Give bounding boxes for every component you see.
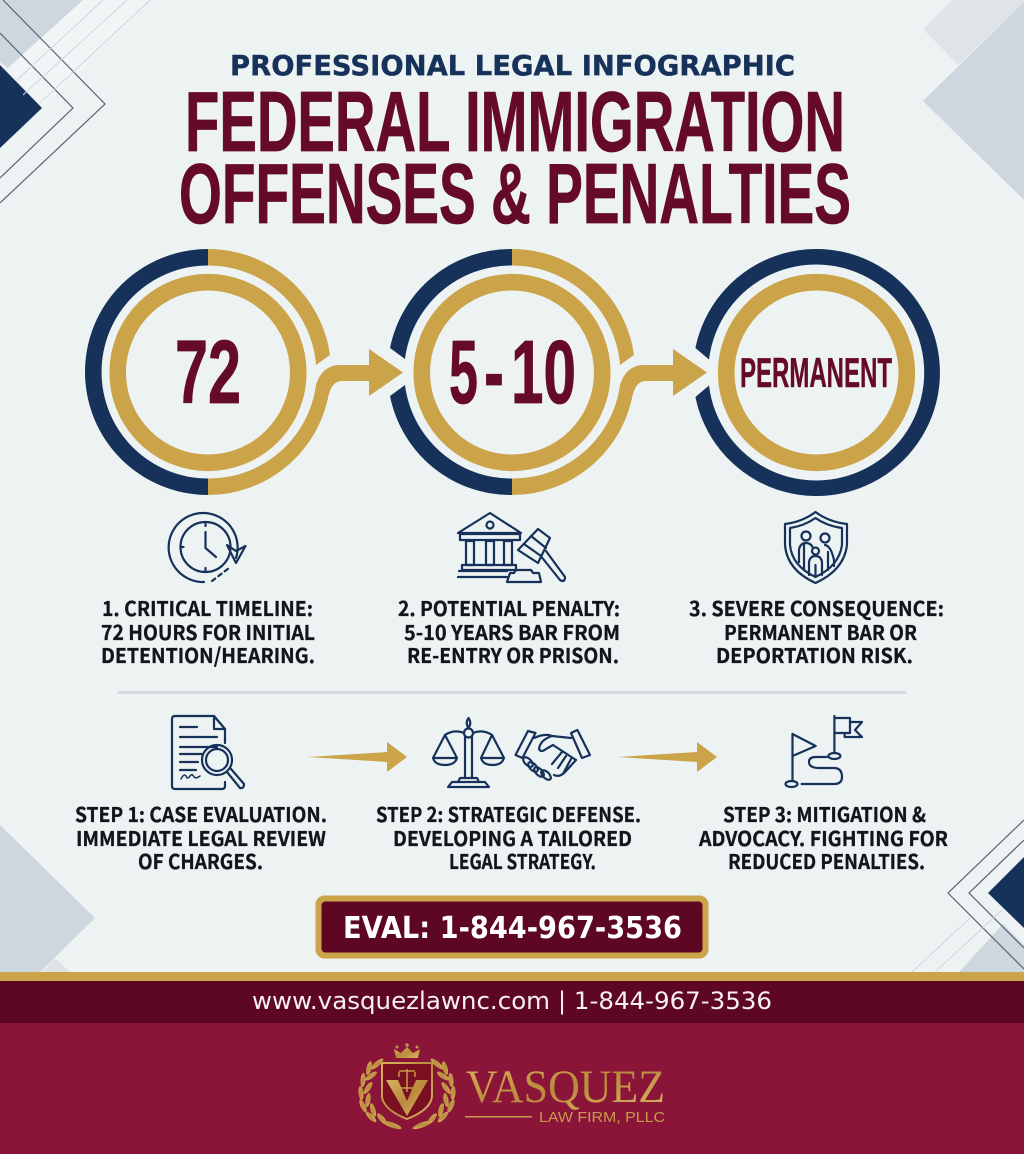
text: critical timeline: DETENTION/HEARING. xyxy=(101,639,315,669)
text: step 3: STEP 3: MITIGATION & xyxy=(723,798,926,828)
text: step 3: REDUCED PENALTIES. xyxy=(728,845,925,875)
icon: courthouse and gavel xyxy=(458,513,565,582)
text: severe consequence: DEPORTATION RISK. xyxy=(716,639,913,669)
stat circle: 5-10: - xyxy=(484,323,504,423)
text: potential penalty: 2. POTENTIAL PENALTY: xyxy=(398,592,620,622)
contact strip xyxy=(0,981,1024,1023)
crown xyxy=(394,1043,420,1058)
text: potential penalty xyxy=(398,592,620,669)
decoration: bottom-left diamonds xyxy=(0,825,95,972)
text: step 3 xyxy=(698,798,948,875)
text: potential penalty: RE-ENTRY OR PRISON. xyxy=(407,639,619,669)
text: step 1: IMMEDIATE LEGAL REVIEW xyxy=(76,822,326,852)
text: step 1: STEP 1: CASE EVALUATION. xyxy=(75,798,327,828)
shield crest xyxy=(382,1063,432,1119)
text: severe consequence: PERMANENT BAR OR xyxy=(724,616,917,646)
wordmark subtitle: LAW FIRM, PLLC xyxy=(539,1109,665,1126)
eyebrow heading: PROFESSIONAL LEGAL INFOGRAPHIC xyxy=(230,49,795,82)
arrow: step 1 to step 2 xyxy=(308,742,407,772)
stat circle: 5-10: 10 xyxy=(511,323,576,423)
text: step 1: OF CHARGES. xyxy=(138,845,263,875)
stat circle: permanent xyxy=(695,249,940,496)
laurel wreath xyxy=(358,1057,456,1131)
stat circle: permanent: PERMANENT xyxy=(740,349,892,396)
wordmark: VASQUEZ xyxy=(466,1061,665,1113)
stat circle: 72: 72 xyxy=(175,323,241,423)
footer panel xyxy=(0,1023,1024,1154)
text: critical timeline: 72 HOURS FOR INITIAL xyxy=(101,616,315,646)
text: step 2: LEGAL STRATEGY. xyxy=(449,845,596,875)
icon: scales of justice xyxy=(433,718,504,787)
text: severe consequence xyxy=(689,592,944,669)
firm logo xyxy=(358,1043,665,1131)
text: step 2 xyxy=(376,798,641,875)
text: critical timeline: 1. CRITICAL TIMELINE: xyxy=(102,592,313,622)
icon: clock xyxy=(169,513,246,582)
icon: path with flags xyxy=(786,716,862,787)
arrow: 5-10 to permanent xyxy=(512,349,707,495)
stat circle: 5-10 xyxy=(390,249,634,495)
decoration: top-right diamonds xyxy=(923,0,1024,200)
call to action button: EVAL: 1-844-967-3536 xyxy=(343,911,682,946)
call to action button xyxy=(316,896,708,958)
text: step 1 xyxy=(75,798,327,875)
stat circle: 5-10: 5 xyxy=(449,323,478,423)
title xyxy=(179,75,851,242)
arrow: step 2 to step 3 xyxy=(618,742,717,772)
gold footer band xyxy=(0,972,1024,981)
decoration: bottom-right diamonds xyxy=(912,820,1024,972)
arrow: 72 to 5-10 xyxy=(208,349,403,495)
text: critical timeline xyxy=(101,592,315,669)
text: step 2: STEP 2: STRATEGIC DEFENSE. xyxy=(376,798,641,828)
text: step 2: DEVELOPING A TAILORED xyxy=(393,822,632,852)
icon: family shield xyxy=(785,512,847,583)
icon: handshake xyxy=(516,730,590,782)
contact strip: www.vasquezlawnc.com | 1-844-967-3536 xyxy=(252,987,772,1015)
decoration: top-left diamonds xyxy=(0,0,150,203)
text: severe consequence: 3. SEVERE CONSEQUENCE: xyxy=(689,592,944,622)
text: step 3: ADVOCACY. FIGHTING FOR xyxy=(698,822,948,852)
icon: document with magnifier xyxy=(172,716,244,789)
text: potential penalty: 5-10 YEARS BAR FROM xyxy=(404,616,620,646)
stat circle: 72 xyxy=(85,249,330,495)
